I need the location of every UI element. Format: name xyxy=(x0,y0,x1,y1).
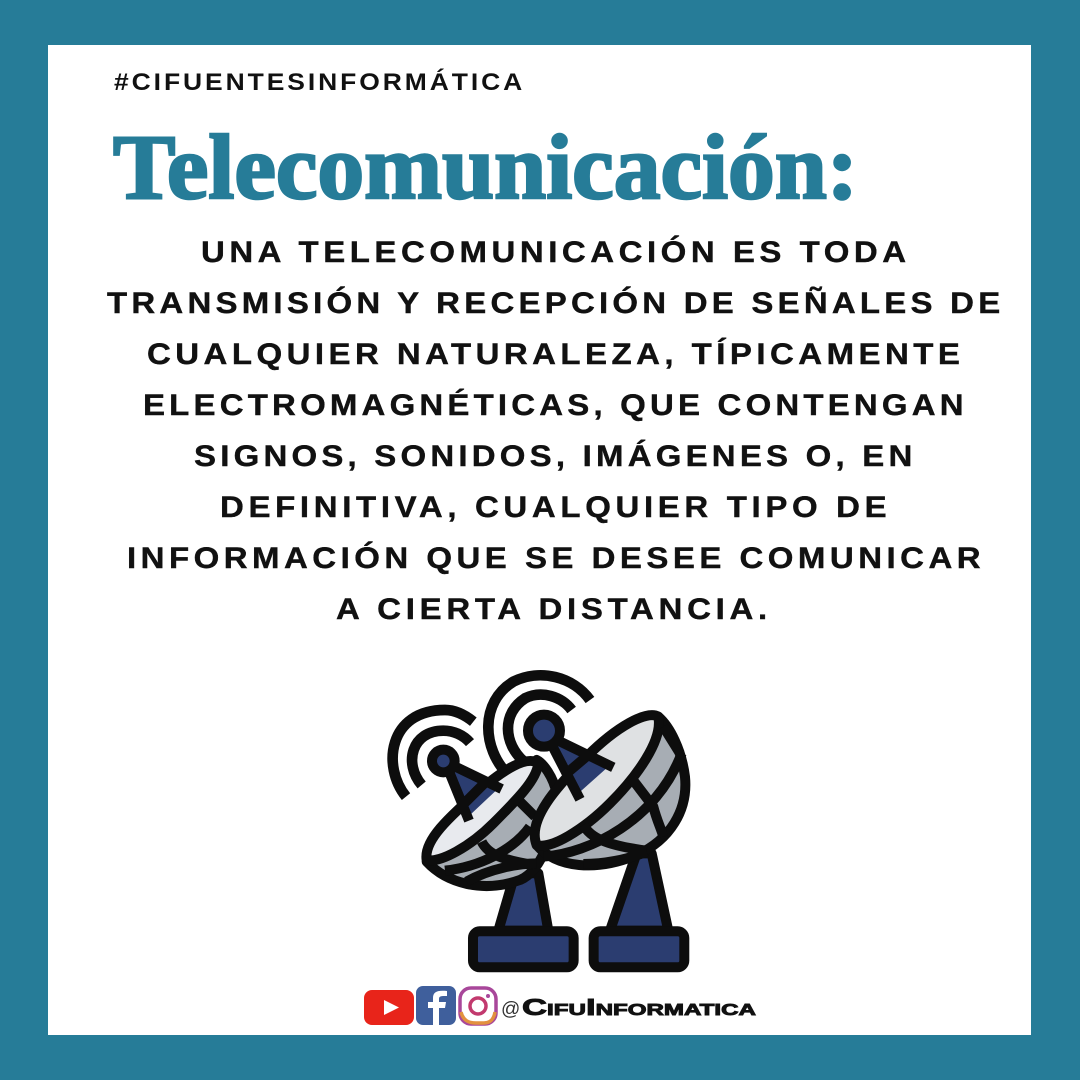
hashtag: #CIFUENTESINFORMÁTICA xyxy=(114,68,522,96)
icon: left feed arm xyxy=(432,750,502,821)
text block: definition: UNA TELECOMUNICACIÓN ES TODA xyxy=(201,234,906,269)
text block: definition: A CIERTA DISTANCIA. xyxy=(336,591,767,626)
icon: left tower xyxy=(473,873,574,967)
icon: satellite dishes xyxy=(393,675,685,967)
icon: left signal waves xyxy=(393,710,473,797)
text block: definition xyxy=(107,234,1000,626)
icon: right feed arm xyxy=(528,715,613,799)
handle at sign: @ xyxy=(501,999,520,1020)
icon: Instagram xyxy=(460,988,496,1024)
text block: definition: SIGNOS, SONIDOS, IMÁGENES O, EN xyxy=(194,438,912,473)
text block: definition: DEFINITIVA, CUALQUIER TIPO DE xyxy=(220,489,887,524)
text block: definition: ELECTROMAGNÉTICAS, QUE CONTENGAN xyxy=(143,387,964,422)
icon: left dish xyxy=(426,760,557,886)
title: Telecomunicación: xyxy=(113,116,858,218)
text block: definition: TRANSMISIÓN Y RECEPCIÓN DE SEÑALES DE xyxy=(107,285,1000,320)
icon: YouTube xyxy=(364,990,414,1025)
icon: right signal waves xyxy=(488,675,590,775)
icon: right dish xyxy=(535,715,685,865)
text block: definition: INFORMACIÓN QUE SE DESEE COMUNICAR xyxy=(127,540,981,575)
text block: definition: CUALQUIER NATURALEZA, TÍPICAMENTE xyxy=(147,336,960,371)
icon: right tower xyxy=(594,853,684,967)
handle name: C IFU INFORMATICA xyxy=(522,994,757,1020)
icon: Facebook xyxy=(416,986,456,1025)
